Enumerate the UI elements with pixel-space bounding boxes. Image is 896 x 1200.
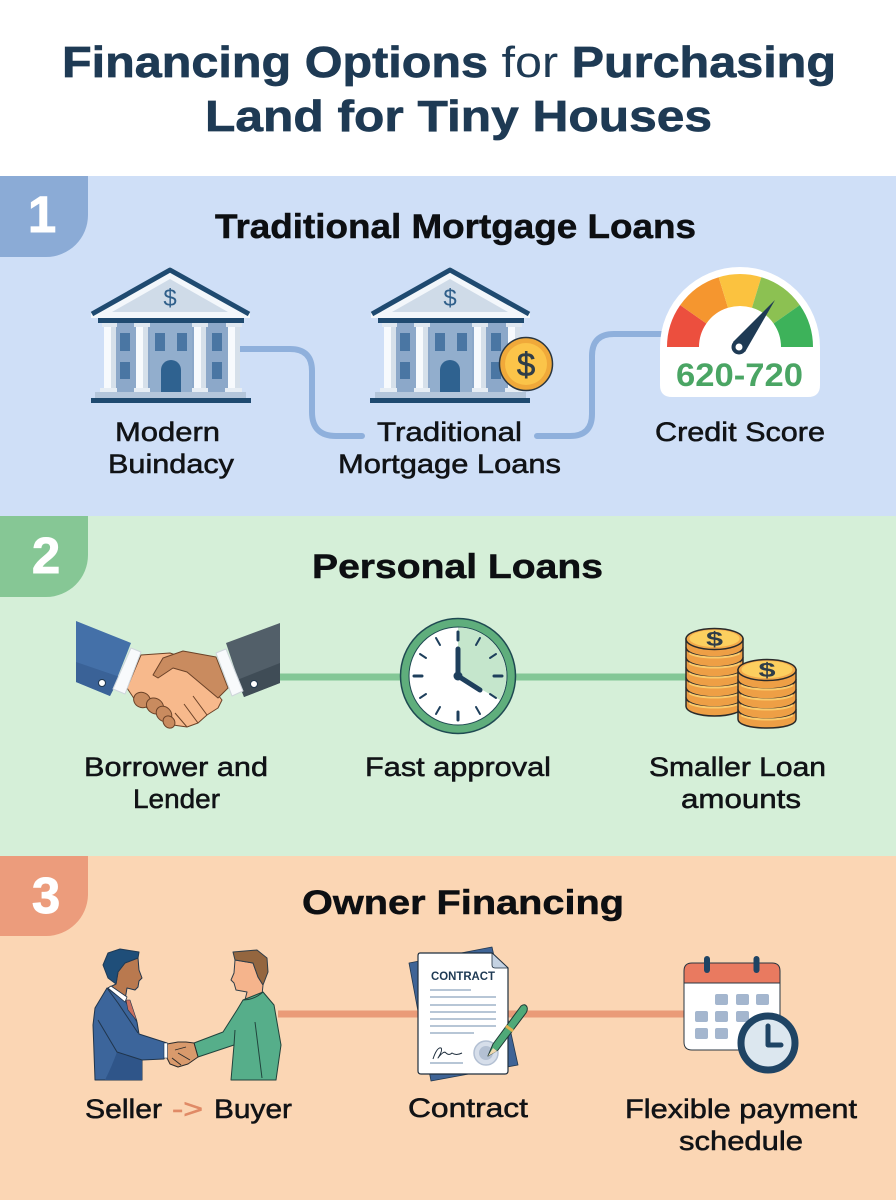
icon: bank — [91, 267, 251, 403]
icon: dollar coin: $ — [517, 346, 535, 383]
heading: owner financing: Owner Financing — [302, 884, 624, 922]
connector: orange line — [278, 1010, 690, 1018]
badge: number 3 — [0, 856, 88, 936]
icon: coin stacks: $ — [706, 629, 723, 651]
title: Financing Options for Purchasing — [62, 38, 836, 87]
figure: seller — [93, 949, 167, 1080]
icon: clock — [400, 618, 516, 734]
label: seller to buyer — [85, 1094, 292, 1124]
icon: bank: $ — [163, 285, 177, 312]
label: smaller loan amounts: amounts — [681, 784, 801, 814]
icon: seller and buyer handshake — [93, 949, 281, 1080]
label: smaller loan amounts — [649, 752, 826, 814]
label: flexible payment schedule: schedule — [679, 1126, 803, 1156]
icon: dollar coin — [500, 338, 552, 390]
label: seller to buyer: Seller — [85, 1094, 162, 1124]
panel: owner financing — [0, 856, 896, 1200]
panel: traditional mortgage loans — [0, 176, 896, 516]
label: traditional mortgage loans: Mortgage Loans — [338, 449, 561, 479]
title: Land for Tiny Houses — [205, 92, 712, 141]
icon: contract with pen: CONTRACT — [431, 969, 496, 983]
icon: bank with coin: $ — [443, 285, 457, 312]
icon: calendar with clock — [684, 956, 795, 1070]
badge: number 2 — [0, 516, 88, 597]
label: modern buindacy: Buindacy — [108, 449, 235, 479]
label: borrower and lender — [84, 752, 268, 814]
connector: bank to bank with coin — [240, 349, 362, 436]
icon: credit score gauge: 620-720 — [676, 357, 803, 393]
icon: credit score gauge — [660, 267, 820, 397]
label: traditional mortgage loans — [338, 417, 561, 479]
icon: small clock — [741, 1016, 795, 1070]
label: contract: Contract — [408, 1093, 529, 1123]
label: smaller loan amounts: Smaller Loan — [649, 752, 826, 782]
badge: number 2: 2 — [32, 527, 60, 584]
label: seller to buyer: Buyer — [214, 1094, 292, 1124]
heading: traditional mortgage loans: Traditional Mortgage Loans — [215, 208, 696, 246]
label: borrower and lender: Lender — [133, 784, 220, 814]
label: flexible payment schedule: Flexible payment — [625, 1094, 858, 1124]
icon: contract with pen — [409, 947, 527, 1081]
label: flexible payment schedule — [625, 1094, 858, 1156]
icon: bank with coin — [370, 267, 552, 403]
badge: number 3: 3 — [32, 867, 60, 924]
heading: personal loans: Personal Loans — [312, 548, 603, 586]
label: traditional mortgage loans: Traditional — [377, 417, 522, 447]
icon: coin stacks — [686, 628, 796, 728]
label: modern buindacy: Modern — [115, 417, 220, 447]
panel: personal loans — [0, 516, 896, 856]
label: credit score: Credit Score — [655, 417, 825, 447]
icon: handshake — [76, 621, 280, 731]
connector: green line — [280, 674, 690, 680]
label: modern buindacy — [108, 417, 235, 479]
badge: number 1: 1 — [28, 186, 56, 243]
connector: bank with coin to credit score — [537, 334, 664, 436]
title — [0, 0, 896, 176]
icon: coin stacks: $ — [758, 660, 776, 682]
badge: number 1 — [0, 176, 88, 257]
hands — [164, 1042, 198, 1067]
label: fast approval: Fast approval — [365, 752, 551, 782]
label: seller to buyer: -> — [172, 1094, 203, 1124]
figure: buyer — [194, 950, 281, 1080]
label: borrower and lender: Borrower and — [84, 752, 268, 782]
